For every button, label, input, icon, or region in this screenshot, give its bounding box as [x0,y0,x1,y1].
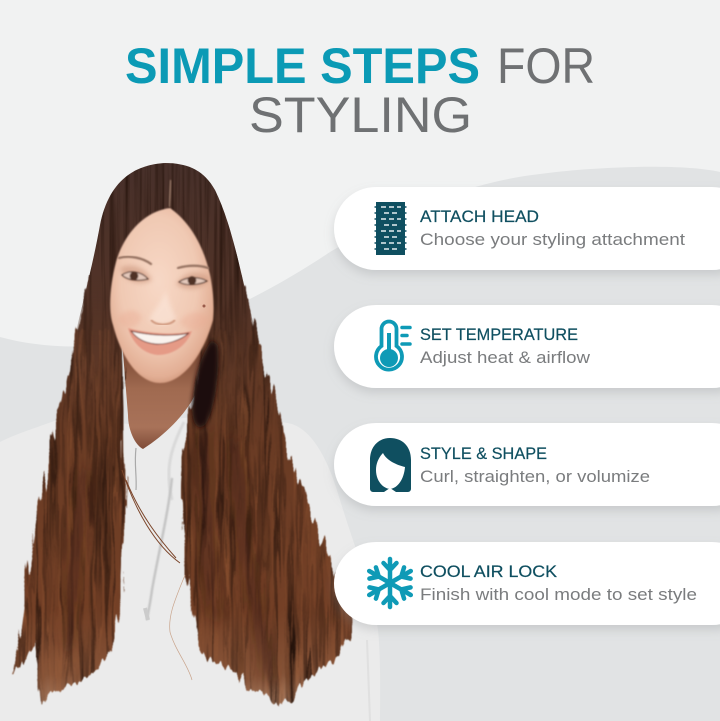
hair parting [169,180,171,207]
icon: woman's hair [370,438,411,492]
title: SIMPLE STEPS [125,38,480,94]
card: cool air lock [334,542,720,625]
photo: smiling woman with long hair [0,160,380,721]
long lower hair [12,275,354,707]
hoodie [0,417,380,721]
step description: Curl, straighten, or volumize [420,467,650,486]
eye sockets [120,266,210,289]
step heading: COOL AIR LOCK [420,562,558,581]
dark hair shadow beside neck [192,340,218,427]
hair texture [13,275,352,706]
mouth [128,328,192,355]
card: set temperature [334,305,720,388]
step heading: STYLE & SHAPE [420,444,547,463]
card: attach head [334,187,720,270]
step heading: ATTACH HEAD [420,207,539,226]
background wave [0,167,720,721]
smooth top of head [74,163,254,340]
nose [149,290,176,324]
title: FOR [497,38,595,94]
eyes [122,272,207,285]
step description: Finish with cool mode to set style [420,585,697,604]
step description: Choose your styling attachment [420,230,685,249]
step heading: SET TEMPERATURE [420,325,578,344]
hood and drawstring [135,422,370,721]
title: STYLING [249,87,472,143]
mole [202,304,206,308]
icon: snowflake [366,559,414,607]
card: style and shape [334,423,720,506]
face [110,180,214,383]
loose strands [122,470,192,680]
icon: thermometer [376,322,410,370]
icon: brush head [374,202,406,255]
hair [0,160,370,710]
step description: Adjust heat & airflow [420,348,591,367]
title [125,38,595,143]
eyebrows [119,257,208,268]
cheeks [118,310,208,330]
neck [122,340,205,449]
